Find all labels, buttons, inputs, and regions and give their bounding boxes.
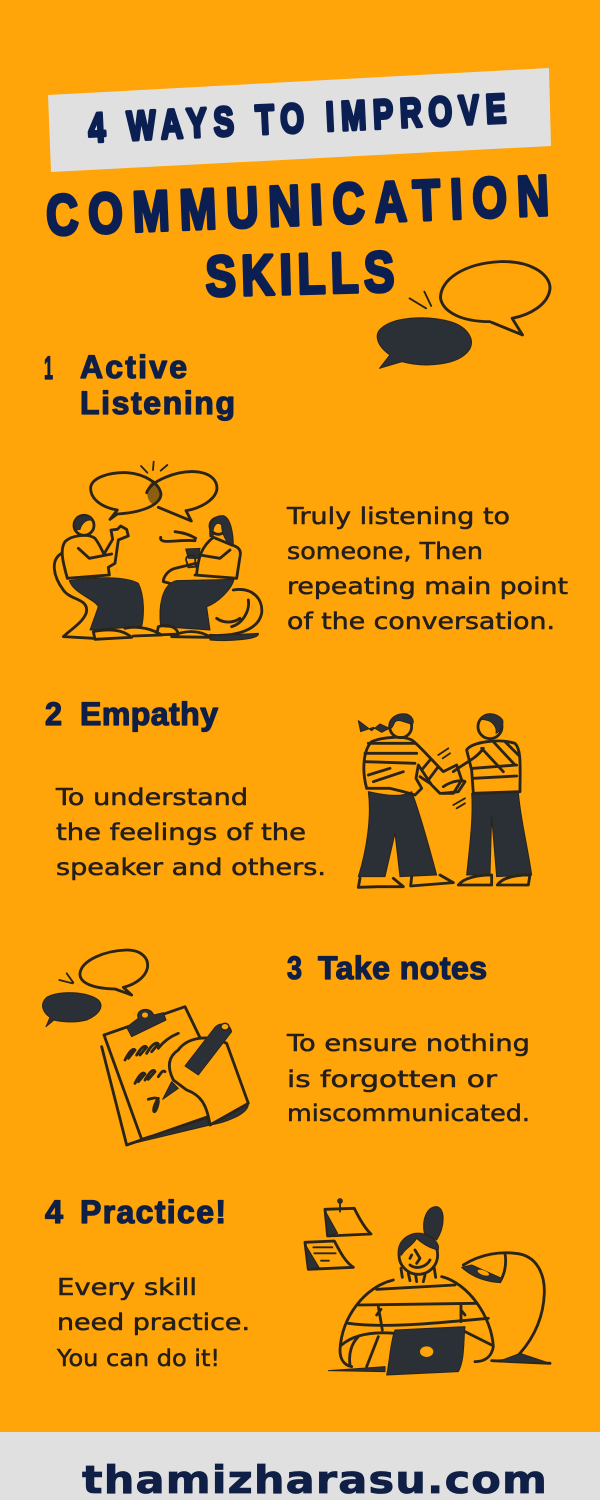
section 4 heading: Practice! [80,1194,226,1230]
section 1 heading: Listening [80,385,235,421]
title banner [48,68,551,172]
section 1 heading: 1 [44,350,53,386]
sticky notes [305,1199,371,1269]
section 2 text: To understand [55,785,248,811]
section 4 text: need practice. [57,1310,250,1336]
section 4 text: Every skill [57,1275,197,1301]
section 2 text: speaker and others. [56,855,326,881]
section 4 text: You can do it! [56,1346,220,1372]
heading: communication: COMMUNICATION [45,164,550,247]
clipboard [102,1007,248,1145]
section 3 text: is forgotten or [287,1067,498,1093]
speech bubbles [91,462,217,521]
section 1 text [286,504,568,635]
desk lamp [462,1253,550,1363]
section 4 heading: 4 [45,1194,63,1230]
section 3 text: miscommunicated. [287,1101,530,1127]
speech bubbles [43,950,148,1027]
title banner: 4 WAYS TO IMPROVE [87,85,507,151]
footer band [0,1432,600,1500]
woman [358,714,465,887]
illustration: two people talking [54,462,262,641]
section 1 text: of the conversation. [287,609,555,635]
heading: skills: SKILLS [205,239,395,308]
hand and pen [163,1023,248,1125]
right person [157,516,262,641]
section 2 text [55,785,326,881]
section 1 heading [44,349,235,421]
illustration: person at laptop [305,1199,550,1375]
illustration: clipboard and bubbles [43,950,248,1145]
section 3 text [286,1031,530,1127]
section 2 heading: 2 [45,696,62,732]
section 2 text: the feelings of the [56,820,306,846]
section 3 heading: 3 [287,950,302,986]
section 3 heading: Take notes [318,950,487,986]
illustration: handshake [358,714,532,887]
section 1 heading: Active [80,349,187,385]
section 1 text: Truly listening to [286,504,510,530]
person [328,1207,493,1375]
section 4 text [56,1275,250,1372]
left person [54,515,162,639]
section 2 heading: Empathy [80,696,218,732]
section 3 text: To ensure nothing [286,1031,530,1057]
section 1 text: someone, Then [287,539,483,565]
section 1 text: repeating main point [287,574,568,600]
man [443,714,532,885]
icon: title speech bubbles [377,262,550,368]
